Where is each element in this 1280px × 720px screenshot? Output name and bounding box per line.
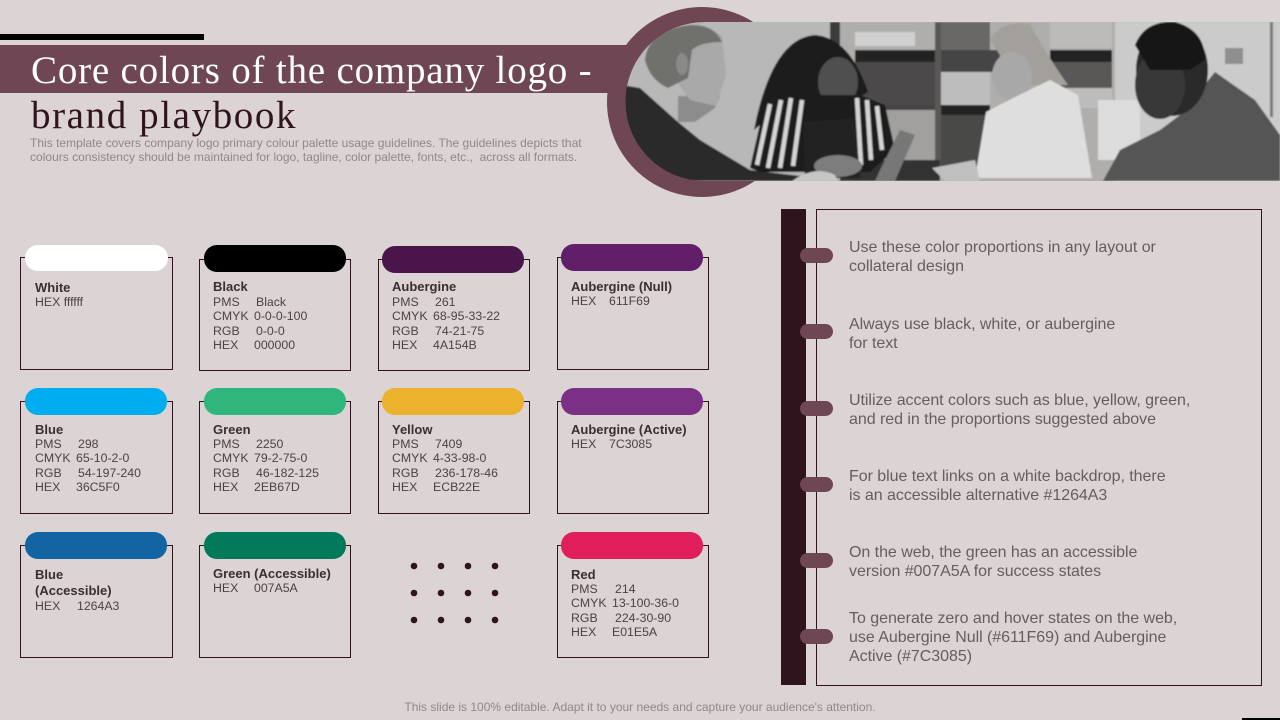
card: Black: PMS <box>213 295 240 309</box>
top black accent bar <box>0 34 204 40</box>
card: Red: 13-100-36-0 <box>612 596 679 610</box>
card: Aubergine (Active): HEX <box>571 437 596 451</box>
guideline 6: use Aubergine Null (#611F69) and Aubergine <box>849 629 1166 646</box>
guideline 1: collateral design <box>849 258 964 275</box>
guidelines box <box>816 209 1262 686</box>
card: Yellow: 4-33-98-0 <box>433 451 486 465</box>
man right <box>1103 72 1280 181</box>
card: Yellow: CMYK <box>392 451 428 465</box>
subtitle text: colours consistency should be maintained for logo, tagline, color palette, fonts, etc., across all formats. <box>30 150 577 164</box>
card: Aubergine: 4A154B <box>433 338 477 352</box>
card: Yellow: ECB22E <box>433 480 480 494</box>
card: Red: E01E5A <box>612 625 657 639</box>
card: Aubergine (Null): HEX <box>571 294 596 308</box>
card: Aubergine: PMS <box>392 295 419 309</box>
decorative dot grid <box>410 562 498 624</box>
card: Aubergine (Null): Aubergine (Null) <box>571 279 672 294</box>
card: Blue: RGB <box>35 466 62 480</box>
card: Aubergine: Aubergine <box>392 279 456 294</box>
title: Core colors of the company logo - <box>31 49 592 92</box>
card: Aubergine (Active): Aubergine (Active) <box>571 422 687 437</box>
shelves <box>855 50 935 62</box>
card: Blue: 298 <box>78 437 99 451</box>
card: White: White <box>35 280 70 295</box>
card: Blue: HEX <box>35 480 60 494</box>
card: Red: 214 <box>615 582 636 596</box>
card: Blue (Accessible): (Accessible) <box>35 583 112 598</box>
card: Blue (Accessible): Blue <box>35 567 63 582</box>
subtitle text <box>30 136 582 164</box>
card: Red: 224-30-90 <box>615 611 671 625</box>
card: Yellow <box>378 388 530 514</box>
guideline 3: and red in the proportions suggested above <box>849 411 1156 428</box>
tab marker 4 <box>800 477 833 492</box>
card: Black: 000000 <box>254 338 295 352</box>
tab marker 2 <box>800 324 833 339</box>
guideline 4 <box>849 468 1166 504</box>
card: Green: Green <box>213 422 251 437</box>
card: Red: HEX <box>571 625 596 639</box>
card: Black: 0-0-0-100 <box>254 309 307 323</box>
card: Blue (Accessible): 1264A3 <box>77 599 119 613</box>
woman striped jacket <box>754 35 868 130</box>
card: White: HEX ffffff <box>35 295 83 309</box>
guideline 1 <box>849 239 1156 275</box>
guideline 1: Use these color proportions in any layout or <box>849 239 1156 256</box>
card: Green: CMYK <box>213 451 249 465</box>
spine bar <box>781 209 806 685</box>
title: brand playbook <box>31 94 297 137</box>
card: Green: 79-2-75-0 <box>254 451 307 465</box>
card: Green (Accessible): 007A5A <box>254 581 298 595</box>
card: Aubergine: 74-21-75 <box>435 324 484 338</box>
card: Yellow: PMS <box>392 437 419 451</box>
card: Black: CMYK <box>213 309 249 323</box>
card: Yellow: Yellow <box>392 422 432 437</box>
card: Blue: 65-10-2-0 <box>76 451 129 465</box>
guideline 6: Active (#7C3085) <box>849 648 972 665</box>
guideline 2: for text <box>849 335 898 352</box>
title band <box>0 45 630 93</box>
guideline 5 <box>849 544 1137 580</box>
card: Blue: 54-197-240 <box>78 466 141 480</box>
card: Yellow: RGB <box>392 466 419 480</box>
card: Black: HEX <box>213 338 238 352</box>
guideline 6: To generate zero and hover states on the web, <box>849 610 1177 627</box>
guideline 2: Always use black, white, or aubergine <box>849 316 1115 333</box>
card: Red: CMYK <box>571 596 607 610</box>
footer note: This slide is 100% editable. Adapt it to your needs and capture your audience's attention. <box>404 700 876 714</box>
tab marker 6 <box>800 629 833 644</box>
card: Blue <box>20 388 173 514</box>
card: Aubergine: 261 <box>435 295 456 309</box>
guideline 2 <box>849 316 1115 352</box>
card: Blue (Accessible): HEX <box>35 599 60 613</box>
card: White <box>20 245 173 370</box>
card: Black: 0-0-0 <box>256 324 285 338</box>
subtitle text: This template covers company logo primary colour palette usage guidelines. The guidelines depicts that <box>30 136 582 150</box>
card: Aubergine (Null) <box>557 244 709 370</box>
card: Blue: PMS <box>35 437 62 451</box>
card: Blue: CMYK <box>35 451 71 465</box>
card: Black: RGB <box>213 324 240 338</box>
card: Green: RGB <box>213 466 240 480</box>
card: Green: 2250 <box>256 437 283 451</box>
card: Green: HEX <box>213 480 238 494</box>
card: Blue: Blue <box>35 422 63 437</box>
card: Green: 2EB67D <box>254 480 300 494</box>
woman white top <box>990 23 1068 85</box>
card: Green: 46-182-125 <box>256 466 319 480</box>
card: Aubergine: CMYK <box>392 309 428 323</box>
tab marker 5 <box>800 553 833 568</box>
card: Green <box>199 388 351 514</box>
card: Aubergine: HEX <box>392 338 417 352</box>
card: Aubergine <box>378 246 530 371</box>
card: Blue (Accessible) <box>20 532 173 658</box>
card: Black <box>199 245 351 371</box>
guideline 5: version #007A5A for success states <box>849 563 1101 580</box>
card: Aubergine (Active) <box>557 388 709 514</box>
card: Red: Red <box>571 567 596 582</box>
photo: team meeting with maroon ring <box>607 7 1280 197</box>
guideline 4: is an accessible alternative #1264A3 <box>849 487 1107 504</box>
guideline 4: For blue text links on a white backdrop, there <box>849 468 1166 485</box>
card: Green (Accessible): Green (Accessible) <box>213 566 331 581</box>
guideline 5: On the web, the green has an accessible <box>849 544 1137 561</box>
man left <box>678 96 720 122</box>
card: Red: RGB <box>571 611 598 625</box>
card: Green (Accessible) <box>199 532 351 658</box>
card: Yellow: HEX <box>392 480 417 494</box>
card: Aubergine: 68-95-33-22 <box>433 309 500 323</box>
card: Blue: 36C5F0 <box>76 480 120 494</box>
card: Green: PMS <box>213 437 240 451</box>
card: Red: PMS <box>571 582 598 596</box>
card: Aubergine (Active): 7C3085 <box>609 437 652 451</box>
guideline 6 <box>849 610 1177 665</box>
tab marker 1 <box>800 248 833 263</box>
card: Yellow: 236-178-46 <box>435 466 498 480</box>
guideline 3: Utilize accent colors such as blue, yellow, green, <box>849 392 1190 409</box>
card: Aubergine: RGB <box>392 324 419 338</box>
title <box>31 49 592 137</box>
tab marker 3 <box>800 401 833 416</box>
guideline 3 <box>849 392 1190 428</box>
card: Red <box>557 532 709 658</box>
card: Yellow: 7409 <box>435 437 462 451</box>
card: Black: Black <box>256 295 286 309</box>
card: Aubergine (Null): 611F69 <box>609 294 650 308</box>
card: Green (Accessible): HEX <box>213 581 238 595</box>
bottom-right black accent bar <box>1242 718 1280 720</box>
card: Black: Black <box>213 279 248 294</box>
